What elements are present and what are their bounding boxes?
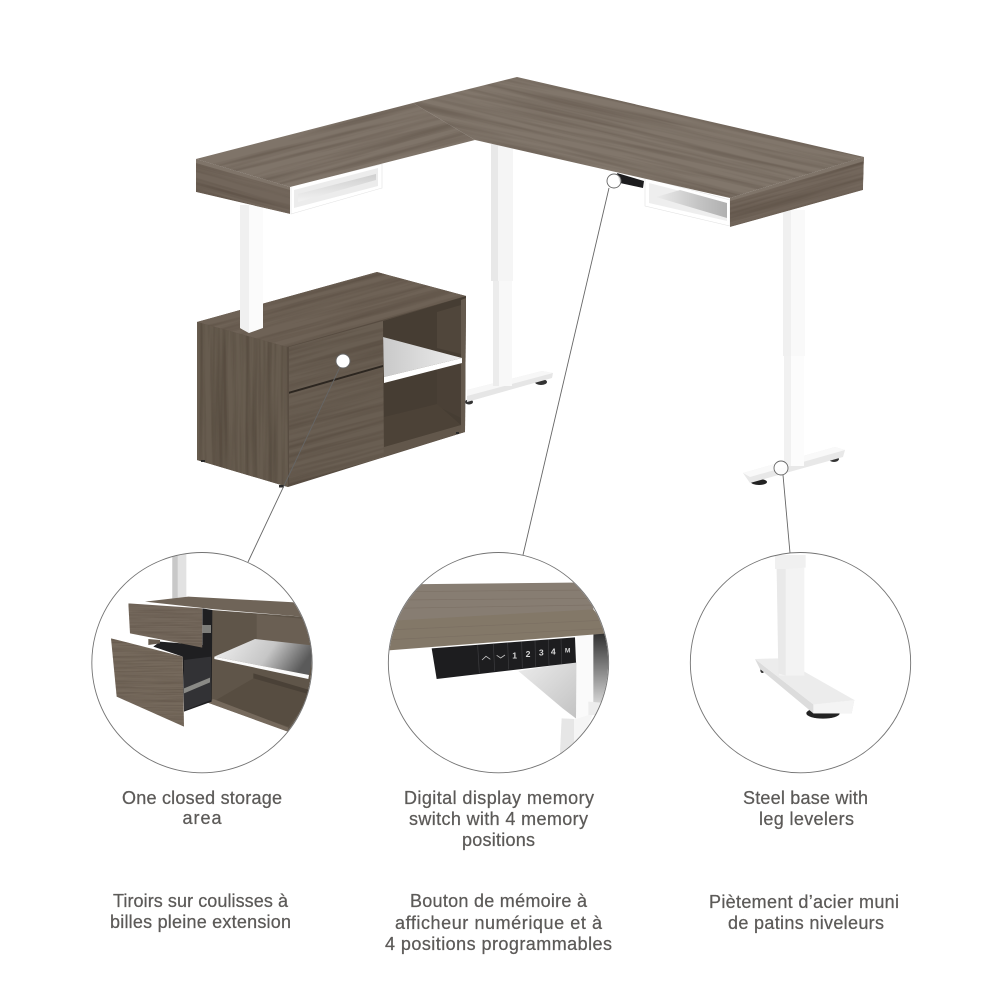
- desktop: [387, 582, 593, 622]
- left leg lower section in front of cabinet: [240, 260, 263, 333]
- detail circle: drawers: [92, 552, 315, 773]
- left wing top: [196, 103, 475, 187]
- left cubby: [291, 164, 382, 214]
- right wing top: [413, 77, 864, 198]
- caption: base (French): Piètement d’acier muni: [709, 892, 899, 912]
- right leg: [743, 210, 845, 485]
- caption: switch (French): 4 positions programmables: [385, 934, 612, 954]
- inner walls: [205, 610, 315, 732]
- caption: storage (English): area: [182, 808, 222, 828]
- cabinet feet: [201, 432, 459, 488]
- back leg: [465, 144, 553, 404]
- cabinet top: [197, 272, 466, 347]
- open shelving: [383, 296, 466, 457]
- lower drawer front: [111, 638, 184, 726]
- shelf: [214, 639, 315, 675]
- right wing front edge: [730, 157, 864, 227]
- caption: switch (French): Bouton de mémoire à: [410, 891, 588, 911]
- caption: base (French): de patins niveleurs: [728, 913, 884, 933]
- caption: switch (French): afficheur numérique et à: [395, 913, 603, 933]
- drawer interior: [153, 608, 212, 712]
- caption: storage (French): Tiroirs sur coulisses à: [113, 891, 289, 911]
- callout line: switch: [523, 174, 621, 555]
- storage cabinet: [197, 272, 466, 488]
- leg: [178, 554, 186, 598]
- carcass top: [145, 597, 302, 617]
- control panel: 1: [512, 650, 517, 660]
- control panel: 3: [539, 648, 544, 658]
- control panel: 2: [526, 649, 531, 659]
- left leg: [240, 205, 263, 333]
- foot: [755, 659, 854, 713]
- cabinet side panel: [197, 322, 288, 487]
- caption: switch (English): positions: [462, 830, 535, 850]
- control panel: 4: [551, 646, 556, 656]
- leveler pads: [806, 710, 840, 719]
- bracket: [518, 662, 577, 719]
- upper drawer front: [128, 603, 202, 648]
- caption: storage (French): billes pleine extension: [110, 912, 291, 932]
- detail circle: switch: [380, 552, 613, 773]
- caption: base (English): Steel base with: [743, 788, 868, 808]
- desk switch: [617, 173, 644, 188]
- callout line: base: [774, 461, 790, 553]
- caption: switch (English): switch with 4 memory: [409, 809, 588, 829]
- dark background cubby: [593, 634, 608, 702]
- left wing front edge: [196, 159, 290, 214]
- control panel: [432, 637, 576, 679]
- caption: switch (English): Digital display memory: [404, 788, 594, 808]
- control panel: M: [565, 648, 571, 655]
- callout line: storage: [248, 354, 350, 562]
- detail circle: base: [690, 552, 911, 773]
- L-shaped desk: [196, 77, 864, 485]
- drawers: [289, 321, 384, 482]
- column: [786, 568, 804, 671]
- caption: base (English): leg levelers: [759, 809, 854, 829]
- caption: storage (English): One closed storage: [122, 788, 282, 808]
- right cubby: [645, 178, 730, 226]
- cabinet base silhouette: [197, 272, 466, 487]
- leg: [576, 634, 593, 719]
